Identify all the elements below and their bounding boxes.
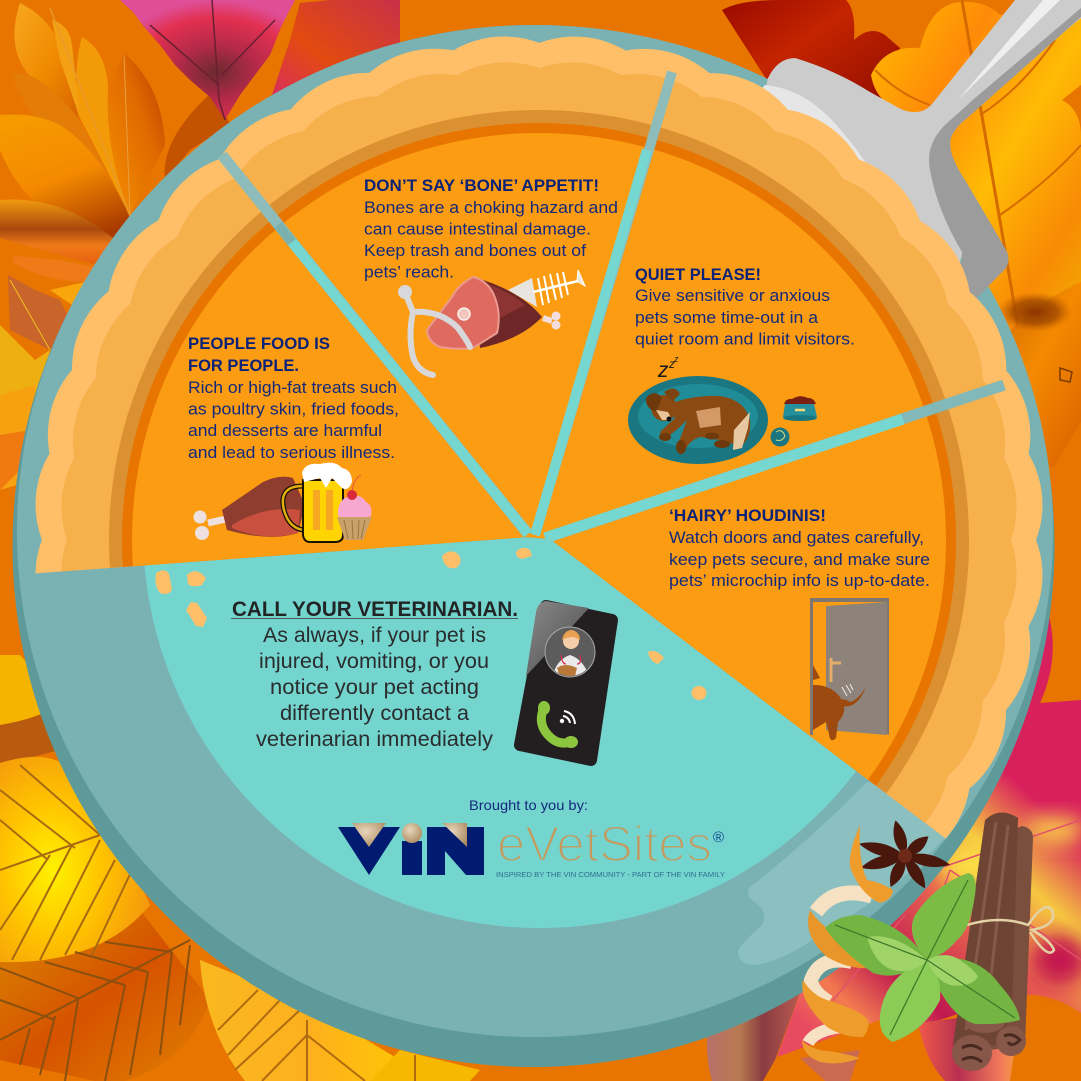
teal empty slice floor: [143, 134, 937, 928]
icon: ham, wishbone and fish bone: [398, 270, 585, 375]
panel text: call your veterinarian: [231, 598, 518, 751]
filling: [132, 133, 946, 780]
panel text: bones: Keep trash and bones out of: [364, 241, 586, 260]
red oak leaf top right: [722, 0, 900, 120]
brought to you by: Brought to you by:: [469, 797, 588, 813]
plate highlight: [738, 782, 945, 965]
panel text: bones: Bones are a choking hazard and: [364, 198, 618, 217]
yellow leaves bottom left: [0, 655, 480, 1081]
panel text: people food: and desserts are harmful: [188, 421, 382, 440]
icon: sleeping dog on bed: z: [668, 357, 675, 371]
panel text: people food: [188, 334, 399, 462]
magenta leaf bottom right: [707, 597, 1081, 1081]
panel text: bones: can cause intestinal damage.: [364, 220, 591, 238]
panel text: call your veterinarian: notice your pet acting: [270, 676, 479, 699]
divider: right: [545, 385, 1004, 538]
icon: dog escaping through door: [810, 598, 889, 740]
yellow oak leaf right: [871, 0, 1081, 468]
panel text: bones: [364, 176, 618, 282]
panel text: bones: DON’T SAY ‘BONE’ APPETIT!: [364, 176, 599, 195]
panel text: people food: and lead to serious illness.: [188, 443, 395, 462]
panel text: hairy houdinis: Watch doors and gates carefully,: [669, 528, 924, 547]
icon: cinnamon sticks: [952, 812, 1054, 1071]
panel text: people food: FOR PEOPLE.: [188, 356, 299, 375]
zzz: z: [657, 359, 669, 382]
panel text: quiet please: Give sensitive or anxious: [635, 286, 830, 305]
logo: eVetSites: eVetSites: [497, 816, 712, 872]
icon: sleeping dog on bed: z: [673, 354, 679, 364]
panel text: call your veterinarian: CALL YOUR VETERINARIAN.: [232, 598, 518, 621]
panel text: call your veterinarian: injured, vomiting, or you: [259, 650, 489, 673]
panel text: call your veterinarian: As always, if your pet is: [263, 624, 486, 647]
filling ring: [122, 123, 956, 786]
panel text: people food: as poultry skin, fried foods,: [188, 400, 399, 418]
icon: phone with vet: [520, 601, 612, 760]
panel text: quiet please: QUIET PLEASE!: [635, 265, 761, 284]
icon: orange peel spiral: [802, 825, 893, 1063]
food bowl: [784, 396, 816, 404]
ball: [770, 428, 790, 446]
logo: eVetSites: INSPIRED BY THE VIN COMMUNITY - PART OF THE VIN FAMILY: [496, 872, 725, 879]
icon: sleeping dog on bed: [628, 354, 817, 464]
panel text: hairy houdinis: [669, 506, 930, 590]
pie with crust: [36, 36, 1042, 838]
crumbs: [156, 548, 706, 700]
panel text: people food: PEOPLE FOOD IS: [188, 334, 330, 353]
inner crust: [62, 62, 1016, 823]
panel text: quiet please: pets some time-out in a: [635, 308, 819, 327]
icon: drumstick, beer and cupcake: [194, 463, 372, 542]
panel text: hairy houdinis: keep pets secure, and make sure: [669, 550, 930, 569]
pink leaves top centre: [120, 0, 400, 120]
panel text: quiet please: [635, 265, 855, 348]
divider: left: [222, 155, 528, 534]
panel text: quiet please: quiet room and limit visitors.: [635, 330, 855, 348]
panel text: hairy houdinis: pets’ microchip info is up-to-date.: [669, 571, 930, 590]
panel text: call your veterinarian: differently contact a: [280, 702, 469, 725]
spatula: [740, 0, 1081, 320]
autumn leaves top left: [0, 3, 230, 490]
outer crust: [36, 36, 1042, 838]
logo: VIN: [338, 823, 484, 875]
panel text: bones: pets’ reach.: [364, 262, 454, 282]
crust shadow ring: [109, 110, 969, 794]
panel text: people food: Rich or high-fat treats such: [188, 378, 397, 397]
icon: star anise: [857, 819, 951, 892]
divider: top: [535, 72, 672, 535]
icon: basil leaves: [825, 873, 1020, 1042]
logo: eVetSites: ®: [713, 829, 724, 846]
panel text: hairy houdinis: ‘HAIRY’ HOUDINIS!: [669, 506, 826, 525]
panel text: call your veterinarian: veterinarian immediately: [256, 728, 494, 751]
